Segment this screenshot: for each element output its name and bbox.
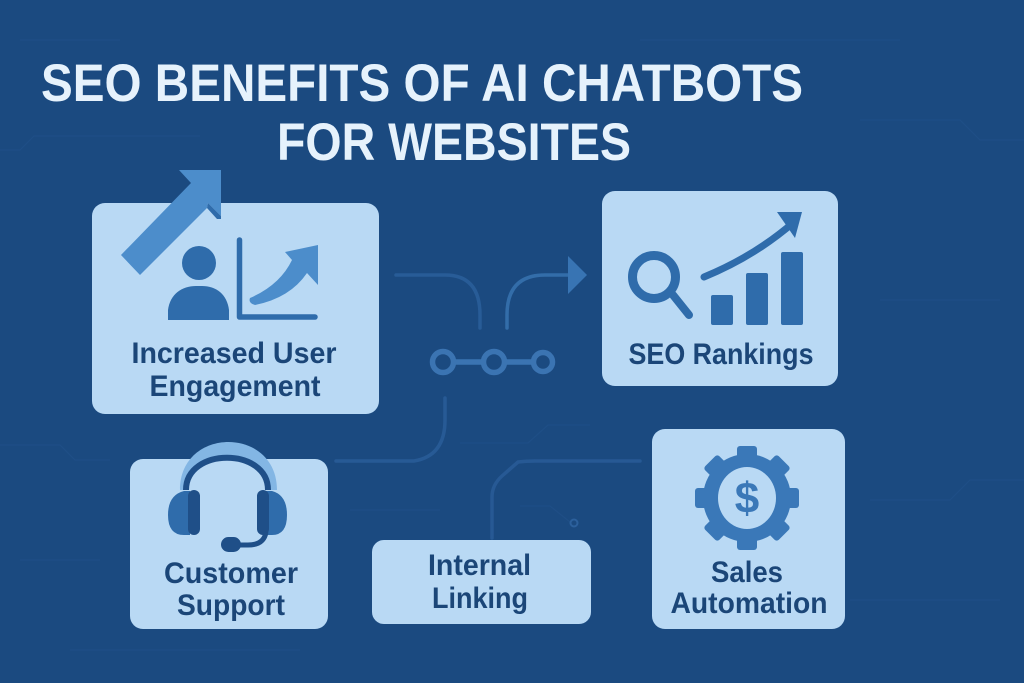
label: Sales [711, 556, 783, 589]
label: Increased User [132, 337, 337, 370]
small circuit node [570, 520, 578, 526]
label: SEO Rankings [628, 338, 814, 371]
label: Internal [428, 549, 531, 582]
icon: large arrow [121, 170, 221, 275]
panel: customer support: Support [177, 589, 285, 622]
title: SEO BENEFITS OF AI CHATBOTS [41, 54, 803, 113]
arrowhead: connector [568, 256, 587, 294]
icon: user [168, 246, 229, 320]
icon: headset [168, 442, 287, 552]
panel: increased user engagement [92, 170, 379, 414]
icon: chart with arrow [240, 240, 318, 317]
connector lines [336, 275, 640, 538]
label: Linking [432, 582, 528, 615]
icon: bars [711, 252, 803, 325]
panel: internal linking [372, 540, 591, 624]
icon: gear with dollar: $ [735, 474, 759, 523]
panel: customer support [130, 442, 328, 629]
icon: trend arrow [704, 212, 802, 277]
title: FOR WEBSITES [277, 113, 631, 172]
icon: gear with dollar [695, 446, 799, 550]
label: Engagement [150, 370, 321, 403]
icon: magnifier [632, 256, 689, 315]
title [41, 54, 803, 172]
panel: seo rankings [602, 191, 838, 386]
node chain [432, 352, 552, 372]
label [670, 556, 828, 620]
panel: sales automation [652, 429, 845, 629]
label [132, 337, 337, 403]
label: Customer [164, 557, 298, 590]
label [428, 549, 531, 615]
label: Automation [670, 587, 828, 620]
